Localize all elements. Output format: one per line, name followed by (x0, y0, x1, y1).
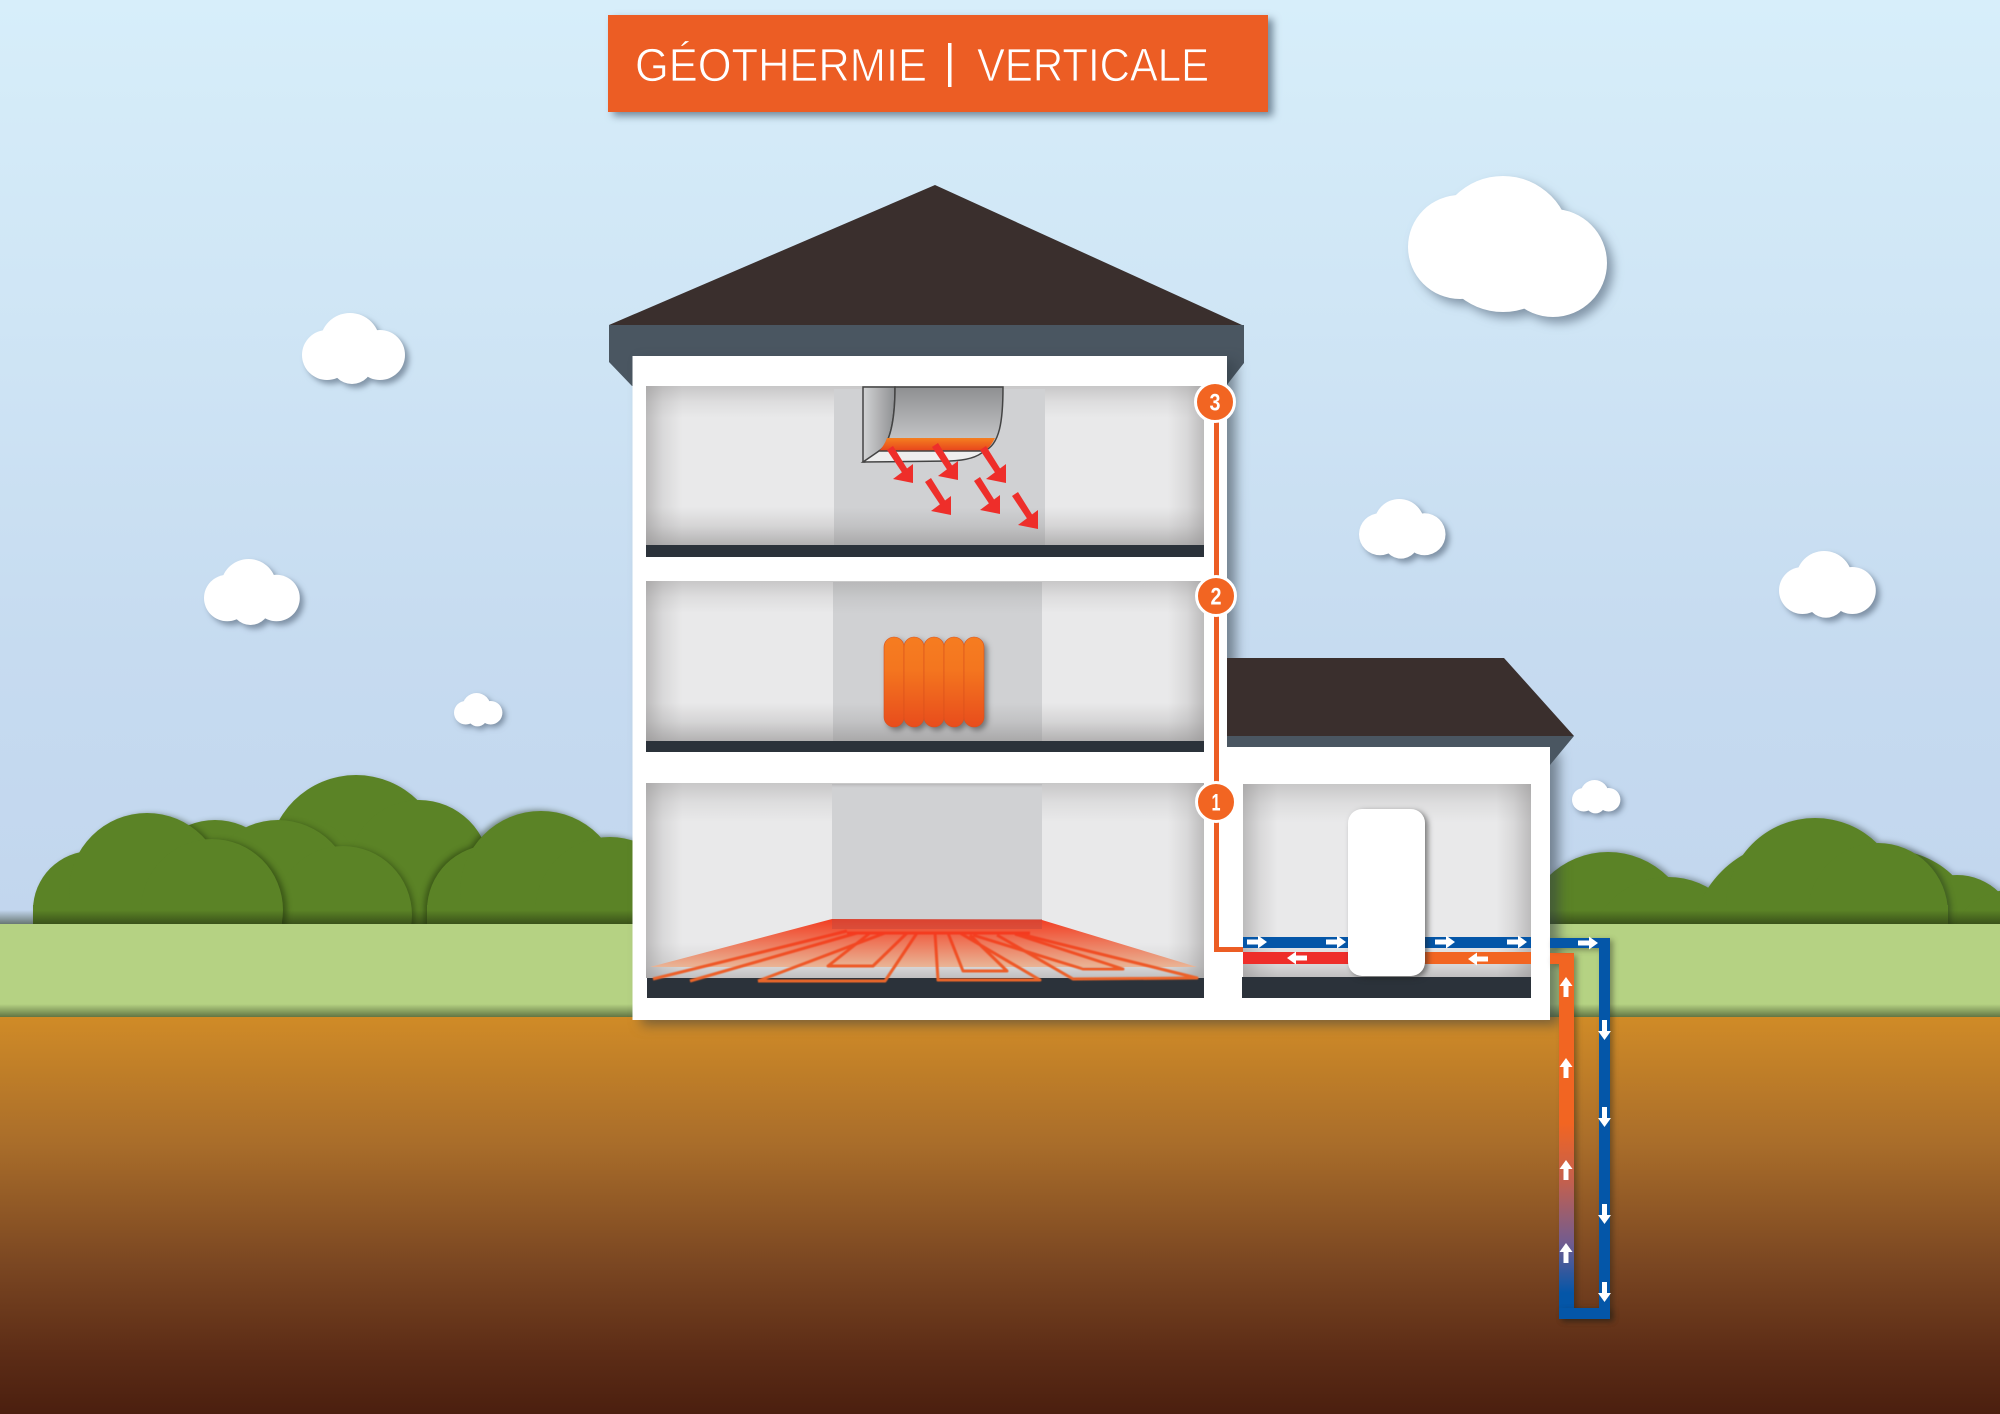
bush middle (145, 820, 412, 984)
floor slab ground floor (647, 978, 1204, 998)
back wall ground floor (832, 784, 1042, 920)
room: annex technical room (1242, 784, 1531, 998)
back wall third floor (834, 389, 1045, 545)
supply pipe blue (1550, 938, 1610, 1319)
radiator (884, 637, 984, 727)
vertical heating circuit line (1216, 402, 1243, 950)
room: second floor (646, 581, 1204, 752)
house walls (632, 356, 1550, 1020)
main roof fascia (609, 325, 1244, 386)
return pipe orange to blue (1550, 953, 1610, 1319)
badge 3: 3 (1210, 390, 1220, 416)
heat pump tank (1348, 809, 1425, 976)
badge 2 (1196, 576, 1236, 616)
main roof (609, 185, 1242, 325)
cloud small right (1572, 780, 1620, 813)
bushes right of house and main right bush (1523, 818, 1948, 1049)
bush front right (427, 811, 685, 987)
floor slab third floor (646, 545, 1204, 557)
cloud small left (454, 693, 502, 726)
floor slab annex (1242, 977, 1531, 998)
indoor cold pipe (1243, 937, 1531, 948)
soil (0, 1017, 2000, 1414)
title banner (608, 15, 1268, 112)
annex fascia (1227, 736, 1574, 765)
bush back centre (238, 775, 490, 951)
badge 3 (1196, 382, 1234, 422)
sky background (0, 0, 2000, 930)
house (609, 185, 1574, 1020)
heated floor (650, 919, 1197, 967)
shadow at base of grass (0, 1004, 2000, 1017)
bush far right back (1800, 850, 2000, 1030)
cloud middle right (1359, 499, 1446, 559)
subtitle text: VERTICALE (977, 39, 1209, 91)
badge 2: 2 (1210, 584, 1222, 610)
badge 1 (1196, 782, 1236, 822)
cloud middle left (204, 559, 300, 625)
annex roof (1227, 658, 1574, 736)
indoor orange pipe (1420, 952, 1531, 964)
underfloor heating pipes (653, 931, 1197, 981)
bush front left (33, 813, 283, 981)
title separator (948, 43, 952, 87)
flow arrows (1247, 936, 1611, 1302)
floor slab second floor (646, 741, 1204, 752)
back wall second floor (833, 582, 1042, 741)
geothermal loop (1550, 938, 1610, 1319)
bushes right cluster (1523, 818, 2000, 1049)
cloud upper left (302, 313, 405, 384)
cloud far right (1779, 551, 1876, 618)
indoor red pipe (1243, 952, 1353, 964)
air conditioner unit (863, 387, 1003, 462)
badge 1: 1 (1212, 790, 1220, 816)
shadow above grass (0, 910, 2000, 924)
grass band (0, 924, 2000, 1017)
room: ground floor (646, 783, 1204, 998)
room: third floor (646, 386, 1204, 557)
cloud large top right (1408, 176, 1607, 317)
warm air arrows (887, 443, 1038, 529)
bushes left cluster (33, 775, 685, 987)
title text: GÉOTHERMIE (635, 39, 927, 91)
